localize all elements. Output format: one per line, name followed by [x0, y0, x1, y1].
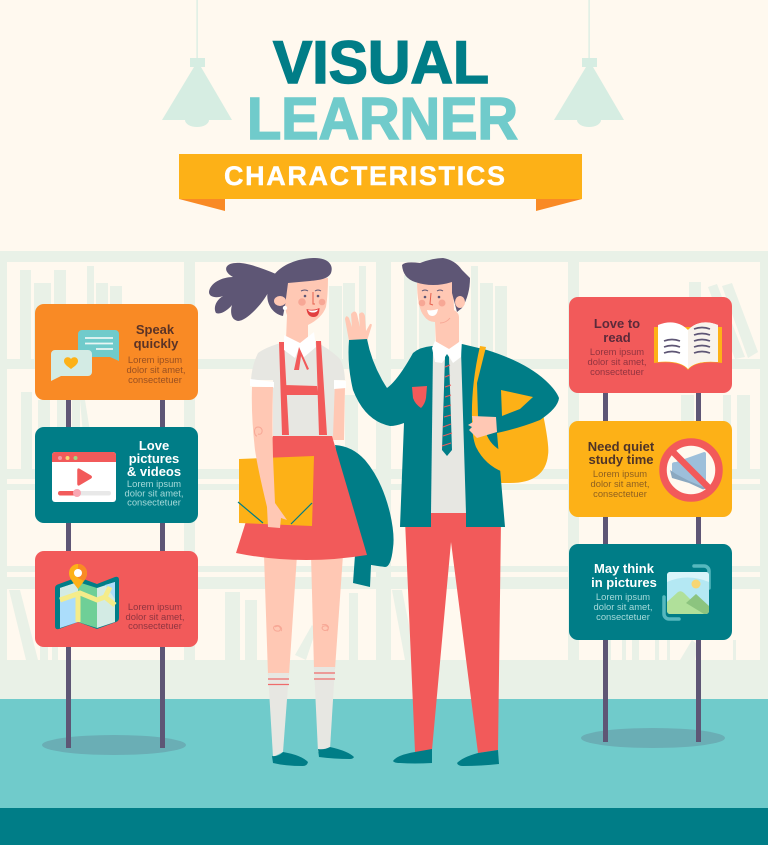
- girl facial features: [298, 290, 325, 317]
- boy neck and face: [417, 280, 459, 352]
- background: bookshelf wall: [0, 251, 768, 699]
- girl collar and ribbon: [284, 332, 316, 370]
- girl folder: [238, 456, 314, 526]
- body text: Lorem ipsum: [128, 354, 182, 365]
- banner label: CHARACTERISTICS: [224, 161, 505, 191]
- heading: Love: [139, 438, 169, 453]
- body text: consectetuer: [593, 488, 647, 499]
- icon: no sound: [663, 442, 719, 498]
- heading: May think: [594, 561, 655, 576]
- icon: video player: [52, 452, 116, 502]
- girl neck and face: [285, 278, 328, 347]
- girl skirt: [236, 436, 367, 560]
- icon: right hanging lamp: [554, 0, 624, 127]
- panel: map: [35, 551, 198, 647]
- heading: & videos: [127, 464, 181, 479]
- girl socks: [268, 667, 335, 757]
- panel: need quiet study time: [569, 421, 732, 517]
- title: learner: LEARNER: [247, 86, 518, 152]
- boy waistband gap: [431, 513, 466, 527]
- body text: Lorem ipsum: [128, 601, 182, 612]
- heading: Need quiet: [588, 439, 655, 454]
- body text: Lorem ipsum: [127, 478, 181, 489]
- girl shoes: [272, 747, 354, 766]
- panel: speak quickly: [35, 304, 198, 400]
- body text: consectetuer: [596, 611, 650, 622]
- boy ear: [455, 296, 465, 308]
- girl legs: [264, 555, 343, 675]
- boy shirt: [431, 350, 466, 513]
- boy backpack strap: [472, 346, 503, 472]
- heading: Speak: [136, 322, 175, 337]
- girl suspenders: [279, 341, 327, 435]
- boy collar: [432, 340, 462, 363]
- icon: picture frame: [664, 566, 709, 619]
- boy hair: [402, 258, 470, 312]
- heading: Love to: [594, 316, 640, 331]
- body text: consectetuer: [127, 496, 181, 508]
- heading: quickly: [134, 336, 179, 351]
- body text: dolor sit amet,: [125, 488, 183, 498]
- boy tie: [442, 354, 452, 456]
- heading: study time: [588, 452, 654, 467]
- body text: dolor sit amet,: [126, 611, 184, 622]
- body text: dolor sit amet,: [594, 601, 652, 612]
- panel: may think in pictures: [569, 544, 732, 640]
- boy jacket: [348, 339, 559, 527]
- floor: [0, 699, 768, 808]
- boy shoes: [393, 749, 499, 766]
- icon: chat bubbles: [51, 330, 119, 381]
- heading: read: [603, 330, 631, 345]
- banner: [179, 154, 582, 211]
- boy facial features: [419, 290, 450, 323]
- heading: pictures: [129, 451, 179, 466]
- body text: dolor sit amet,: [127, 364, 185, 375]
- girl skin swirls: [254, 427, 328, 631]
- icon: open book: [654, 322, 722, 370]
- body text: Lorem ipsum: [590, 346, 644, 357]
- icon: left hanging lamp: [162, 0, 232, 127]
- body text: Lorem ipsum: [596, 591, 650, 602]
- girl hair: [267, 258, 332, 316]
- girl left arm and hand: [252, 387, 287, 528]
- body text: consectetuer: [590, 366, 644, 377]
- boy crest: [412, 386, 427, 408]
- body text: consectetuer: [128, 620, 182, 631]
- body text: dolor sit amet,: [588, 356, 646, 367]
- girl blouse: [251, 342, 345, 436]
- panel: love pictures and videos: [35, 427, 198, 523]
- body text: Lorem ipsum: [593, 468, 647, 479]
- panel: love to read: [569, 297, 732, 393]
- boy hand on bag: [468, 416, 497, 438]
- girl right arm: [332, 386, 345, 440]
- boy trousers: [405, 520, 501, 753]
- girl cuffs: [250, 379, 346, 389]
- floor base strip: [0, 808, 768, 845]
- girl ponytail: [209, 263, 276, 321]
- character: girl: [209, 258, 394, 766]
- character: boy: [345, 258, 559, 766]
- left sign stand: [42, 395, 186, 755]
- boy backpack: [490, 390, 548, 483]
- right sign stand: [581, 390, 725, 748]
- heading: in pictures: [591, 575, 657, 590]
- girl ear and earring: [274, 296, 287, 310]
- girl draped jacket: [335, 445, 394, 587]
- body text: dolor sit amet,: [591, 478, 649, 489]
- body text: consectetuer: [128, 374, 182, 385]
- boy backpack through arm: [501, 390, 533, 416]
- title: visual: VISUAL: [273, 29, 489, 96]
- icon: map with pin: [55, 564, 119, 629]
- boy waving hand: [345, 312, 372, 341]
